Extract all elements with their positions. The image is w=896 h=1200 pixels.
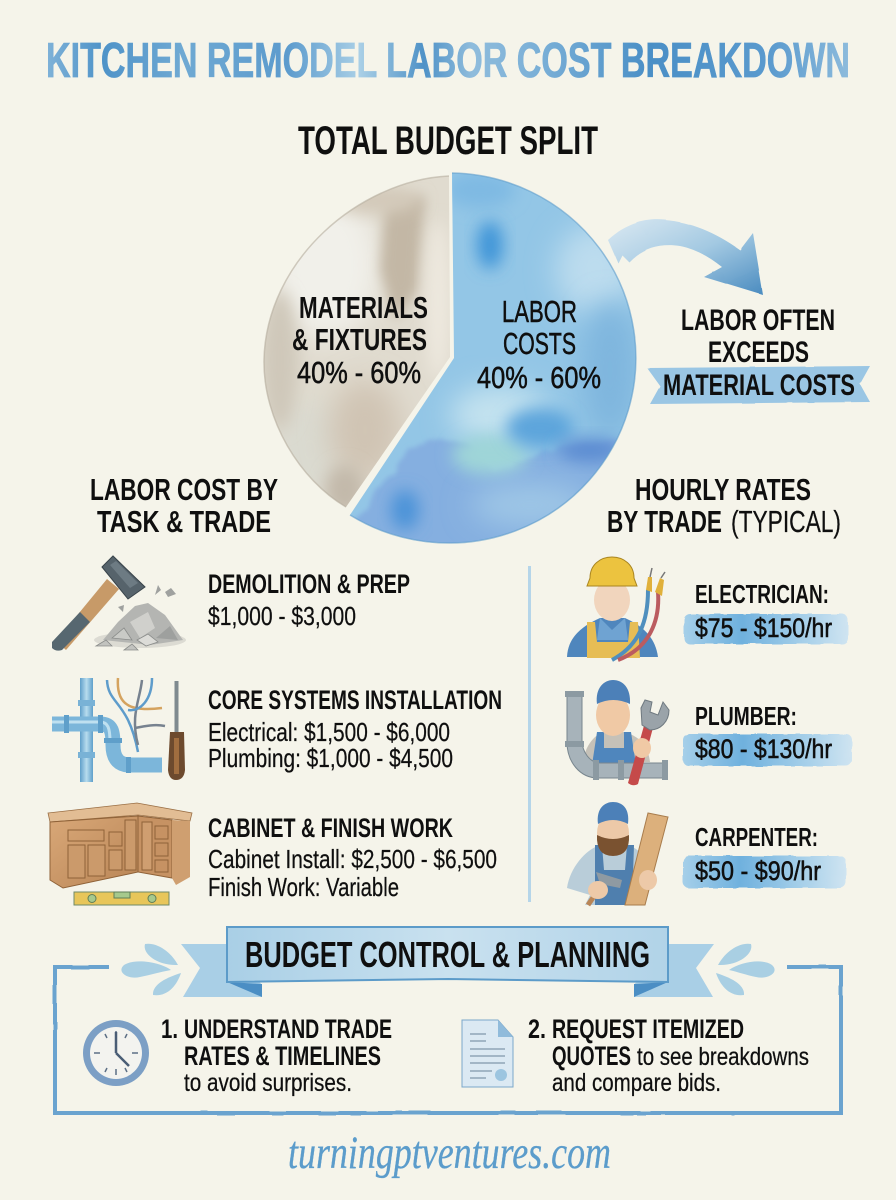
label: labor bbox=[477, 294, 601, 395]
heading: labor cost by task and trade: LABOR COST BY bbox=[90, 472, 278, 507]
icon: pipes, wires and screwdriver bbox=[52, 678, 185, 782]
heading: hourly rates by trade: BY TRADE bbox=[607, 504, 722, 539]
decoration: right splash bbox=[716, 944, 775, 995]
label: labor: COSTS bbox=[503, 326, 576, 361]
text: carpenter bbox=[683, 822, 846, 888]
text: plumber: $80 - $130/hr bbox=[695, 734, 832, 764]
brush highlight bbox=[683, 856, 846, 888]
text: core systems: Plumbing: $1,000 - $4,500 bbox=[208, 743, 453, 773]
text: item 2: 2. bbox=[528, 1014, 546, 1044]
item 1: understand rates bbox=[83, 1014, 392, 1097]
label: materials: MATERIALS bbox=[299, 290, 428, 325]
icon: electrician bbox=[567, 557, 665, 660]
icon: document bbox=[462, 1020, 513, 1087]
trade: plumber bbox=[565, 680, 852, 785]
brush highlight bbox=[683, 734, 852, 766]
text: plumber bbox=[683, 701, 852, 766]
heading: hourly rates by trade: (TYPICAL) bbox=[731, 504, 841, 539]
text: item 2: and compare bids. bbox=[552, 1069, 721, 1097]
text: carpenter: $50 - $90/hr bbox=[695, 856, 821, 886]
icon: cabinets and level bbox=[48, 803, 192, 905]
callout: labor often exceeds material costs: EXCEEDS bbox=[708, 336, 809, 369]
icon: clock bbox=[83, 1020, 149, 1086]
trade: electrician bbox=[567, 557, 848, 660]
pie chart: budget split bbox=[250, 165, 650, 550]
text: item 2 bbox=[528, 1014, 809, 1097]
text: demolition: $1,000 - $3,000 bbox=[208, 601, 356, 631]
text: core systems: Electrical: $1,500 - $6,000 bbox=[208, 717, 450, 747]
text: demolition bbox=[208, 569, 410, 631]
text: core systems: CORE SYSTEMS INSTALLATION bbox=[208, 685, 502, 715]
heading: labor cost by task and trade bbox=[90, 472, 278, 539]
text: item 2: QUOTES bbox=[552, 1041, 631, 1071]
text: electrician: ELECTRICIAN: bbox=[695, 579, 829, 609]
text: item 2: to see breakdowns bbox=[637, 1043, 809, 1071]
text: electrician: $75 - $150/hr bbox=[695, 613, 832, 643]
arrow: curved pointer to callout bbox=[608, 220, 763, 295]
text: demolition: DEMOLITION & PREP bbox=[208, 569, 410, 599]
text: item 1 bbox=[161, 1014, 392, 1097]
text: carpenter: CARPENTER: bbox=[695, 822, 818, 852]
label: materials: & FIXTURES bbox=[292, 322, 427, 357]
footer: website: turningptventures.com bbox=[288, 1127, 611, 1179]
trade: carpenter bbox=[567, 802, 846, 905]
task: cabinet and finish work bbox=[48, 803, 497, 905]
label: labor: 40% - 60% bbox=[477, 360, 601, 395]
panel frame bbox=[55, 967, 841, 1113]
banner heading: BUDGET CONTROL & PLANNING bbox=[245, 934, 650, 975]
label: materials bbox=[292, 290, 428, 390]
label: labor: LABOR bbox=[502, 294, 577, 329]
text: item 2: REQUEST ITEMIZED bbox=[552, 1014, 744, 1044]
icon: plumber bbox=[565, 680, 669, 785]
heading: total budget split: TOTAL BUDGET SPLIT bbox=[298, 119, 598, 163]
text: electrician bbox=[684, 579, 848, 644]
decoration: left splash bbox=[121, 944, 181, 995]
text: plumber: PLUMBER: bbox=[695, 701, 797, 731]
brush highlight bbox=[684, 614, 848, 644]
task: demolition and prep bbox=[52, 556, 410, 651]
ribbon highlight bbox=[647, 366, 870, 404]
item 2: itemized quotes bbox=[462, 1014, 809, 1097]
banner ribbon bbox=[181, 927, 714, 997]
heading: hourly rates by trade: HOURLY RATES bbox=[635, 472, 811, 507]
panel: budget control and planning bbox=[55, 927, 841, 1113]
text: item 1: UNDERSTAND TRADE bbox=[184, 1014, 392, 1044]
callout: labor often exceeds material costs: LABOR OFTEN bbox=[681, 304, 835, 337]
slice: labor costs bbox=[350, 172, 637, 544]
task: core systems installation bbox=[52, 678, 502, 782]
icon: hammer and rubble bbox=[52, 556, 186, 651]
heading: hourly rates by trade bbox=[607, 472, 841, 539]
text: item 1: 1. bbox=[161, 1014, 178, 1044]
column divider bbox=[528, 566, 531, 902]
label: materials: 40% - 60% bbox=[297, 355, 421, 390]
text: item 1: to avoid surprises. bbox=[184, 1069, 352, 1097]
text: cabinet: Finish Work: Variable bbox=[208, 872, 399, 902]
text: cabinet: Cabinet Install: $2,500 - $6,500 bbox=[208, 844, 497, 874]
text: core systems bbox=[208, 685, 502, 773]
text: cabinet bbox=[208, 813, 497, 902]
callout: labor often exceeds material costs bbox=[647, 304, 870, 404]
icon: carpenter bbox=[567, 802, 668, 905]
text: item 1: RATES & TIMELINES bbox=[184, 1041, 381, 1071]
text: cabinet: CABINET & FINISH WORK bbox=[208, 813, 453, 843]
slice: materials and fixtures bbox=[263, 175, 450, 508]
heading: labor cost by task and trade: TASK & TRADE bbox=[97, 504, 271, 539]
